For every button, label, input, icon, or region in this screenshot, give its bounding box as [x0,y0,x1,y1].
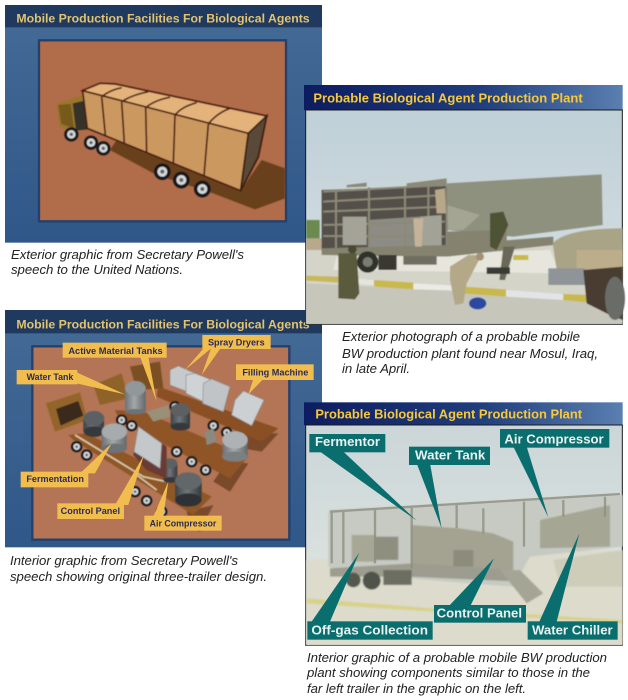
panel 1 heading: Mobile Production Facilities For Biological Agents [16,13,310,26]
panel: exterior photograph [304,85,625,324]
label: Active Material Tanks: Active Material Tanks [68,346,163,356]
label: Spray Dryers: Spray Dryers [208,337,265,347]
label: Water Chiller: Water Chiller [532,623,613,638]
label: Filling Machine: Filling Machine [242,367,308,377]
truck cab [553,228,623,270]
caption: interior graphic: Interior graphic from Secretary Powell's [10,553,238,568]
photo: trailer scene [306,174,625,324]
panel: interior graphic [5,310,322,547]
label: Air Compressor [144,516,222,531]
label: Fermentor: Fermentor [315,434,380,449]
tanks [83,381,248,507]
teal label pointers [312,447,579,622]
label: Filling Machine [236,364,314,380]
caption: exterior graphic [11,247,244,277]
label: Water Tank: Water Tank [27,372,74,382]
label: Off-gas Collection: Off-gas Collection [311,623,428,638]
panel 2 heading: Mobile Production Facilities For Biological Agents [16,319,310,332]
panel 4 heading: Probable Biological Agent Production Plant [315,407,583,422]
caption: interior graphic of plant: far left trailer in the graphic on the left. [307,681,526,696]
panel: exterior graphic [5,5,322,243]
caption: exterior photograph: BW production plant found near Mosul, Iraq, [342,346,598,361]
panel 4 heading [304,402,623,425]
label: Active Material Tanks [63,343,167,358]
caption: exterior graphic: Exterior graphic from Secretary Powell's [11,247,244,262]
caption: interior graphic of plant: Interior graphic of a probable mobile BW production [307,650,607,665]
active material and small parts [147,405,170,422]
label: Control Panel [57,503,124,519]
label: Water Tank [17,370,77,384]
interior scene frame [32,346,289,540]
label: Water Tank: Water Tank [415,447,486,462]
label: Air Compressor: Air Compressor [150,518,217,528]
yellow label pointers [75,347,263,517]
caption: exterior photograph: Exterior photograph of a probable mobile [342,329,580,344]
caption: interior graphic of plant [306,650,607,696]
panel 2 heading [5,310,322,333]
caption: exterior photograph [342,329,598,376]
caption: exterior photograph: in late April. [342,361,410,376]
caption: interior graphic: speech showing original three-trailer design. [10,569,267,584]
label: Spray Dryers [202,335,271,349]
label: Control Panel: Control Panel [61,506,120,516]
soldiers [338,253,359,299]
label: Fermentation [21,472,88,487]
panel 3 heading [304,85,623,110]
label: Fermentation: Fermentation [26,474,84,484]
caption: interior graphic of plant: plant showing components similar to those in the [306,665,590,680]
illustration: exterior truck [57,83,285,209]
panel: interior graphic of plant [304,402,623,645]
spray dryers [170,366,264,426]
panel 3 heading: Probable Biological Agent Production Plant [313,91,583,106]
caption: interior graphic [10,553,267,584]
label: Control Panel: Control Panel [437,606,522,621]
cutaway image area [306,425,622,645]
caption: exterior graphic: speech to the United Nations. [11,262,183,277]
illustration: three trailers [46,362,278,532]
cutaway: washed out trailer [306,495,623,645]
photo area [306,110,622,324]
panel 1 heading [5,5,322,27]
label: Air Compressor: Air Compressor [504,431,604,446]
control panel [133,427,167,479]
truck scene frame [39,40,286,221]
